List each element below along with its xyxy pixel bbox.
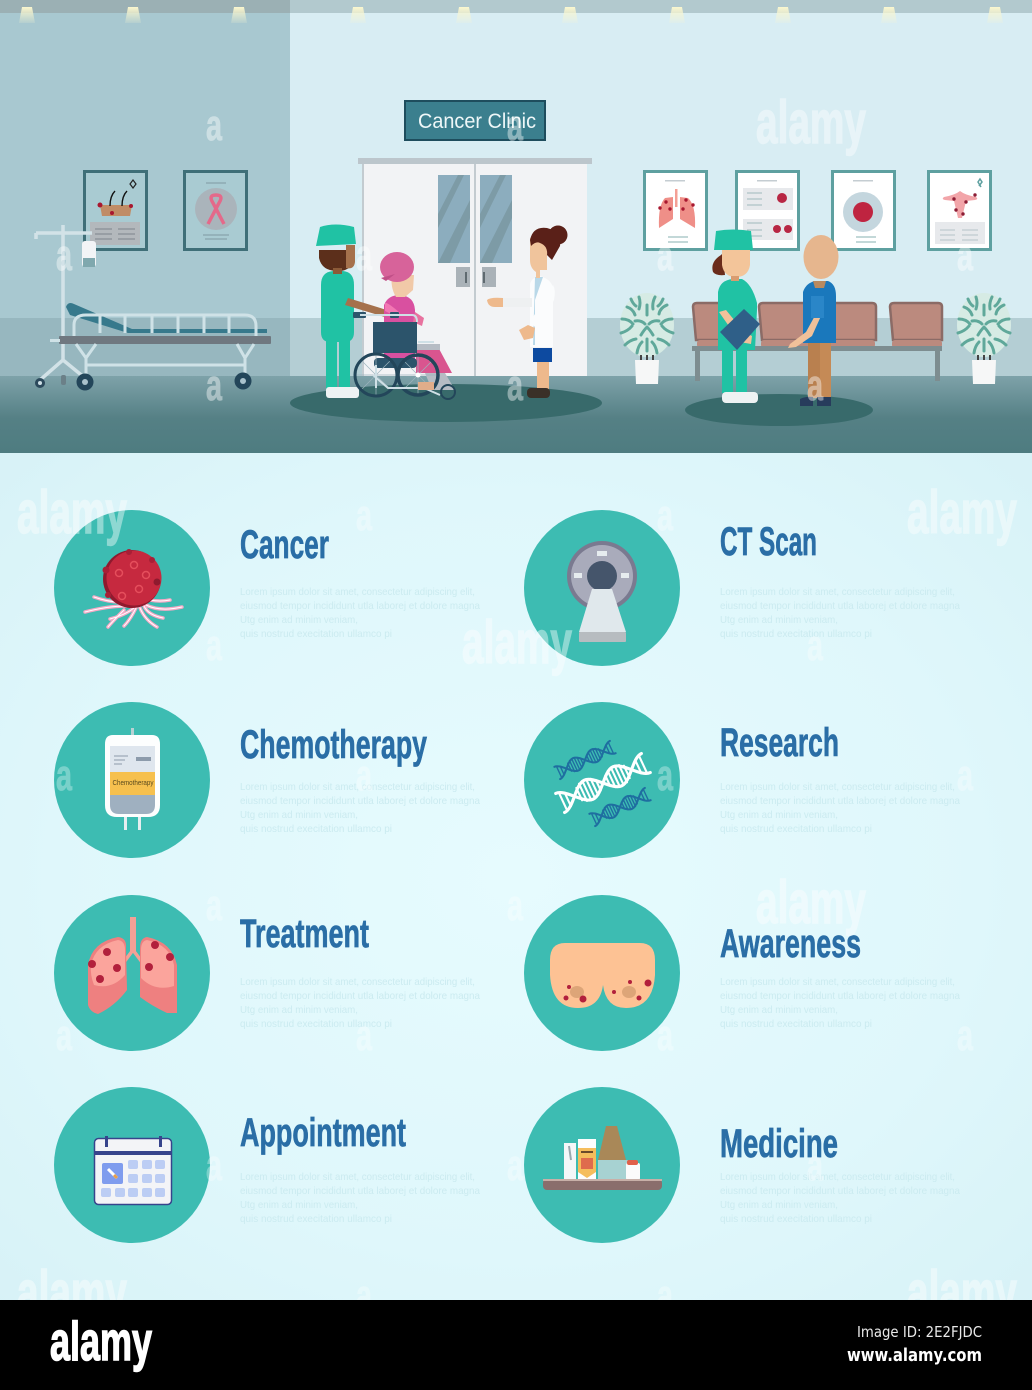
- body text: medicine: [720, 1171, 960, 1225]
- body text: ct scan: quis nostrud execitation ullamco pi: [720, 628, 872, 640]
- bald patient from behind: [788, 235, 838, 406]
- scene watermark letters: a: [507, 101, 523, 150]
- panel watermarks: a: [56, 751, 72, 800]
- heading: medicine: Medicine: [720, 1122, 838, 1166]
- scene watermark letters: a: [356, 231, 372, 280]
- icon: lungs: [54, 895, 210, 1051]
- heading: research: Research: [720, 721, 839, 765]
- panel watermarks: a: [807, 1141, 823, 1190]
- hospital scene illustration: [0, 0, 1032, 453]
- body text: treatment: quis nostrud execitation ullamco pi: [240, 1018, 392, 1030]
- icon: ct scanner: [524, 510, 680, 666]
- footer bar: [0, 1300, 1032, 1390]
- body text: medicine: Lorem ipsum dolor sit amet, consectetur adipiscing elit,: [720, 1171, 955, 1183]
- scene watermark letters: a: [807, 361, 823, 410]
- poster: skin cancer: [84, 172, 146, 250]
- nurse with clipboard: [712, 230, 760, 403]
- plant left: [620, 293, 674, 384]
- scene watermark letters: alamy: [756, 89, 866, 156]
- panel watermarks: a: [957, 1011, 973, 1060]
- item: cancer: [54, 510, 480, 666]
- back wall left: [0, 0, 290, 376]
- hospital bed: [50, 303, 271, 390]
- poster: uterus: [928, 172, 990, 250]
- scene watermark letters: [56, 89, 973, 410]
- body text: treatment: Utg enim ad minim veniam,: [240, 1004, 358, 1016]
- body text: cancer: Lorem ipsum dolor sit amet, consectetur adipiscing elit,: [240, 586, 475, 598]
- poster: pink ribbon: [184, 172, 246, 250]
- body text: chemotherapy: quis nostrud execitation ullamco pi: [240, 823, 392, 835]
- scene watermark letters: a: [206, 101, 222, 150]
- ceiling right: [290, 0, 1032, 13]
- wainscot right: [290, 318, 1032, 376]
- body text: ct scan: eiusmod tempor incididunt utla laborej et dolore magna: [720, 600, 960, 612]
- body text: appointment: [240, 1171, 480, 1225]
- item: chemotherapy: [54, 702, 480, 858]
- icon: cancer cell: [54, 510, 210, 666]
- icon: medicine shelf: [524, 1087, 680, 1243]
- body text: medicine: Utg enim ad minim veniam,: [720, 1199, 838, 1211]
- body text: awareness: eiusmod tempor incididunt utla laborej et dolore magna: [720, 990, 960, 1002]
- panel watermarks: a: [356, 1011, 372, 1060]
- scene watermark letters: a: [56, 231, 72, 280]
- wainscot left: [0, 318, 290, 376]
- clinic sign: [405, 101, 545, 140]
- body text: ct scan: Lorem ipsum dolor sit amet, consectetur adipiscing elit,: [720, 586, 955, 598]
- body text: ct scan: Utg enim ad minim veniam,: [720, 614, 838, 626]
- body text: chemotherapy: Utg enim ad minim veniam,: [240, 809, 358, 821]
- body text: medicine: eiusmod tempor incididunt utla laborej et dolore magna: [720, 1185, 960, 1197]
- heading: awareness: Awareness: [720, 922, 861, 966]
- item: research: [524, 702, 960, 858]
- body text: cancer: [240, 586, 480, 640]
- body text: awareness: quis nostrud execitation ullamco pi: [720, 1018, 872, 1030]
- item: appointment: [54, 1087, 480, 1243]
- doctor: [487, 226, 568, 398]
- back wall right: [290, 0, 1032, 376]
- item: medicine: [524, 1087, 960, 1243]
- ceiling left: [0, 0, 290, 13]
- body text: treatment: [240, 976, 480, 1030]
- door top bar: [358, 158, 592, 164]
- body text: cancer: eiusmod tempor incididunt utla laborej et dolore magna: [240, 600, 480, 612]
- body text: ct scan: [720, 586, 960, 640]
- plant right: [957, 293, 1011, 384]
- body text: awareness: [720, 976, 960, 1030]
- heading: cancer: Cancer: [240, 523, 329, 567]
- body text: cancer: quis nostrud execitation ullamco pi: [240, 628, 392, 640]
- panel watermarks: a: [507, 881, 523, 930]
- double doors: [362, 164, 587, 376]
- patient in wheelchair: [353, 252, 455, 399]
- panel watermarks: a: [356, 491, 372, 540]
- panel watermarks: a: [206, 621, 222, 670]
- panel watermarks: a: [56, 1011, 72, 1060]
- body text: chemotherapy: [240, 781, 480, 835]
- panel watermarks: a: [957, 751, 973, 800]
- heading: ct scan: CT Scan: [720, 520, 817, 564]
- icon: calendar: [54, 1087, 210, 1243]
- panel watermarks: a: [657, 1011, 673, 1060]
- body text: chemotherapy: eiusmod tempor incididunt utla laborej et dolore magna: [240, 795, 480, 807]
- body text: treatment: Lorem ipsum dolor sit amet, consectetur adipiscing elit,: [240, 976, 475, 988]
- body text: treatment: eiusmod tempor incididunt utla laborej et dolore magna: [240, 990, 480, 1002]
- floor: [0, 376, 1032, 453]
- floor shadow right: [685, 394, 873, 426]
- panel watermarks: alamy: [756, 869, 866, 936]
- body text: awareness: Lorem ipsum dolor sit amet, consectetur adipiscing elit,: [720, 976, 955, 988]
- footer url: www.alamy.com: [847, 1345, 982, 1366]
- body text: medicine: quis nostrud execitation ullamco pi: [720, 1213, 872, 1225]
- nurse pushing wheelchair: [316, 224, 390, 398]
- information panel background: [0, 453, 1032, 1300]
- iv pole with drip bag: [35, 225, 96, 388]
- heading: appointment: Appointment: [240, 1111, 406, 1155]
- icon: chemotherapy bag: Chemotherapy: [112, 778, 154, 787]
- panel watermarks: alamy: [17, 1259, 127, 1326]
- scene watermark letters: a: [957, 231, 973, 280]
- item: treatment: [54, 895, 480, 1051]
- scene watermark letters: a: [507, 361, 523, 410]
- item: ct scan: [524, 510, 960, 666]
- scene watermark letters: a: [206, 361, 222, 410]
- footer image id: Image ID: 2E2FJDC: [857, 1323, 982, 1341]
- footer logo: alamy: [50, 1310, 152, 1372]
- icon: dna strands: [524, 702, 680, 858]
- body text: appointment: eiusmod tempor incididunt utla laborej et dolore magna: [240, 1185, 480, 1197]
- panel watermarks: a: [206, 1141, 222, 1190]
- clinic sign: Cancer Clinic: [418, 110, 536, 133]
- panel watermarks: a: [807, 621, 823, 670]
- panel watermarks: a: [657, 491, 673, 540]
- panel watermarks: a: [356, 751, 372, 800]
- icon: chemotherapy bag: [54, 702, 210, 858]
- panel watermarks: a: [657, 751, 673, 800]
- body text: appointment: Lorem ipsum dolor sit amet, consectetur adipiscing elit,: [240, 1171, 475, 1183]
- item: awareness: [524, 895, 960, 1051]
- body text: research: Lorem ipsum dolor sit amet, consectetur adipiscing elit,: [720, 781, 955, 793]
- poster: lungs: [644, 172, 706, 250]
- panel watermarks: a: [657, 1271, 673, 1320]
- panel watermarks: a: [206, 881, 222, 930]
- body text: appointment: quis nostrud execitation ullamco pi: [240, 1213, 392, 1225]
- panel watermarks: alamy: [17, 479, 127, 546]
- body text: chemotherapy: Lorem ipsum dolor sit amet, consectetur adipiscing elit,: [240, 781, 475, 793]
- waiting room bench: [692, 303, 942, 381]
- panel watermarks: [17, 479, 1017, 1326]
- heading: treatment: Treatment: [240, 912, 369, 956]
- body text: research: quis nostrud execitation ullamco pi: [720, 823, 872, 835]
- floor shadow left: [290, 384, 602, 422]
- panel watermarks: alamy: [462, 609, 572, 676]
- body text: cancer: Utg enim ad minim veniam,: [240, 614, 358, 626]
- scene watermark letters: a: [657, 231, 673, 280]
- body text: awareness: Utg enim ad minim veniam,: [720, 1004, 838, 1016]
- ceiling lights: [19, 7, 1003, 23]
- poster: cell division: [736, 172, 798, 250]
- heading: chemotherapy: Chemotherapy: [240, 723, 428, 767]
- body text: appointment: Utg enim ad minim veniam,: [240, 1199, 358, 1211]
- poster: tumour cell: [832, 172, 894, 250]
- body text: research: eiusmod tempor incididunt utla laborej et dolore magna: [720, 795, 960, 807]
- body text: research: [720, 781, 960, 835]
- body text: research: Utg enim ad minim veniam,: [720, 809, 838, 821]
- panel watermarks: a: [507, 1141, 523, 1190]
- icon: breast symptoms: [524, 895, 680, 1051]
- panel watermarks: a: [356, 1271, 372, 1320]
